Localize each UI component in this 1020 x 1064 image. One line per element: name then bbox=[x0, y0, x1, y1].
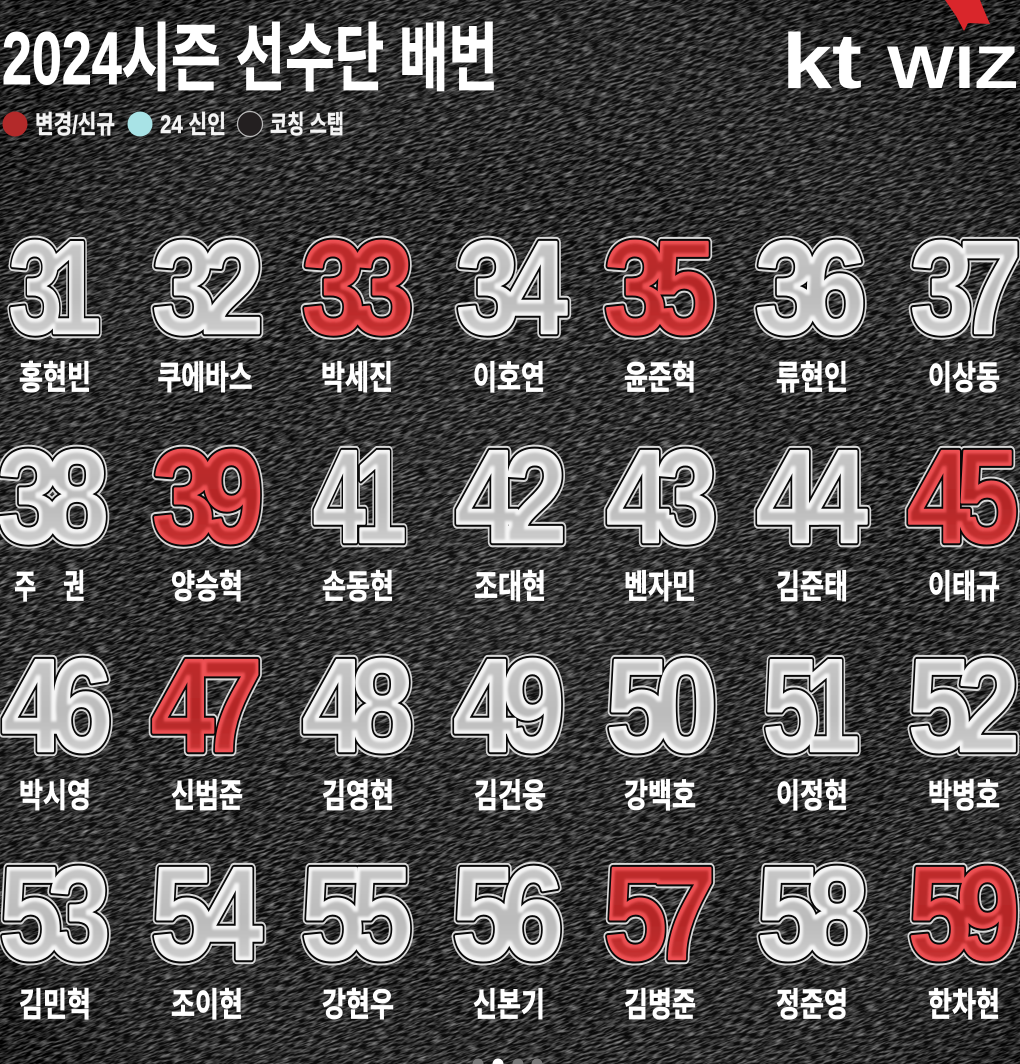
number 54: 54 bbox=[151, 839, 262, 987]
number 35: 35 bbox=[604, 213, 715, 361]
name 39: 양승혁 bbox=[171, 568, 243, 605]
number 38: 38 bbox=[0, 422, 108, 570]
number 47: 47 bbox=[151, 631, 262, 779]
number 59: 59 bbox=[908, 839, 1019, 987]
number 32: 32 bbox=[152, 213, 263, 361]
name 41: 손동현 bbox=[322, 568, 394, 605]
number 37: 37 bbox=[910, 213, 1020, 361]
legend: changed or new bbox=[2, 111, 115, 139]
number 37: 37 bbox=[910, 213, 1020, 361]
legend: 2024 rookie bbox=[128, 111, 226, 139]
number 46: 46 bbox=[1, 631, 112, 779]
number 36: 36 bbox=[755, 213, 866, 361]
number 35: 35 bbox=[604, 213, 715, 361]
number 35: 35 bbox=[604, 213, 715, 361]
number 51: 51 bbox=[763, 631, 860, 779]
number 44: 44 bbox=[756, 422, 867, 570]
number 38: 38 bbox=[0, 422, 108, 570]
number 51: 51 bbox=[763, 631, 860, 779]
name 32: 쿠에바스 bbox=[158, 359, 252, 396]
number 57: 57 bbox=[604, 839, 715, 987]
name 38: 주권 bbox=[14, 569, 85, 606]
number 55: 55 bbox=[301, 839, 412, 987]
number 47: 47 bbox=[151, 631, 262, 779]
name 57: 김병준 bbox=[624, 986, 696, 1023]
number 59: 59 bbox=[908, 839, 1019, 987]
name 33: 박세진 bbox=[321, 359, 393, 396]
number 41: 41 bbox=[313, 423, 406, 571]
carousel dots bbox=[472, 1058, 542, 1064]
number 53: 53 bbox=[0, 839, 110, 987]
number 44: 44 bbox=[756, 422, 867, 570]
number 52: 52 bbox=[908, 631, 1019, 779]
number 33: 33 bbox=[302, 213, 413, 361]
number 57: 57 bbox=[604, 839, 715, 987]
number 59: 59 bbox=[908, 839, 1019, 987]
title: 2024시즌 선수단 배번 bbox=[2, 17, 498, 100]
number 36: 36 bbox=[755, 213, 866, 361]
name 44: 김준태 bbox=[776, 568, 848, 605]
logo: kt wiz bbox=[782, 0, 1018, 105]
name 49: 김건웅 bbox=[474, 777, 546, 814]
name 48: 김영현 bbox=[322, 777, 394, 814]
number 45: 45 bbox=[907, 422, 1018, 570]
number 31: 31 bbox=[9, 215, 101, 362]
number 56: 56 bbox=[452, 839, 563, 987]
number 50: 50 bbox=[606, 631, 717, 779]
number 42: 42 bbox=[455, 422, 566, 570]
number 42: 42 bbox=[455, 422, 566, 570]
logo: kt wiz: WIZ bbox=[887, 34, 1018, 101]
number 55: 55 bbox=[301, 839, 412, 987]
number 52: 52 bbox=[908, 631, 1019, 779]
name 52: 박병호 bbox=[928, 777, 1000, 814]
number 33: 33 bbox=[302, 213, 413, 361]
number 57: 57 bbox=[604, 839, 715, 987]
number 59: 59 bbox=[908, 839, 1019, 987]
name 51: 이정현 bbox=[776, 777, 848, 814]
name 56: 신본기 bbox=[473, 986, 545, 1023]
number 34: 34 bbox=[456, 213, 567, 361]
number 51: 51 bbox=[763, 631, 860, 779]
number 47: 47 bbox=[151, 631, 262, 779]
number 55: 55 bbox=[301, 839, 412, 987]
name 42: 조대현 bbox=[474, 568, 546, 605]
number 50: 50 bbox=[606, 631, 717, 779]
number 58: 58 bbox=[757, 839, 868, 987]
name 58: 정준영 bbox=[776, 986, 848, 1023]
number 48: 48 bbox=[302, 631, 413, 779]
number 36: 36 bbox=[755, 213, 866, 361]
number 53: 53 bbox=[0, 839, 110, 987]
number 52: 52 bbox=[908, 631, 1019, 779]
number 58: 58 bbox=[757, 839, 868, 987]
number 45: 45 bbox=[907, 422, 1018, 570]
number 51: 51 bbox=[763, 631, 860, 779]
number 49: 49 bbox=[453, 631, 564, 779]
number 34: 34 bbox=[456, 213, 567, 361]
number 54: 54 bbox=[151, 839, 262, 987]
number 33: 33 bbox=[302, 213, 413, 361]
name 54: 조이현 bbox=[171, 986, 243, 1023]
name 43: 벤자민 bbox=[624, 568, 696, 605]
number 39: 39 bbox=[152, 422, 263, 570]
name 46: 박시영 bbox=[19, 777, 91, 814]
number 58: 58 bbox=[757, 839, 868, 987]
legend: changed or new: 변경/신규 bbox=[35, 111, 115, 139]
number 39: 39 bbox=[152, 422, 263, 570]
legend: coaching staff: 코칭 스탭 bbox=[270, 111, 344, 139]
name 37: 이상동 bbox=[928, 359, 1000, 396]
number 48: 48 bbox=[302, 631, 413, 779]
number 48: 48 bbox=[302, 631, 413, 779]
name 34: 이호연 bbox=[473, 359, 545, 396]
number 55: 55 bbox=[301, 839, 412, 987]
number 44: 44 bbox=[756, 422, 867, 570]
number 46: 46 bbox=[1, 631, 112, 779]
name 31: 홍현빈 bbox=[19, 359, 91, 396]
number 48: 48 bbox=[302, 631, 413, 779]
name 55: 강현우 bbox=[322, 986, 394, 1023]
number 38: 38 bbox=[0, 422, 108, 570]
name 59: 한차현 bbox=[928, 986, 1000, 1023]
number 49: 49 bbox=[453, 631, 564, 779]
number 37: 37 bbox=[910, 213, 1020, 361]
number 53: 53 bbox=[0, 839, 110, 987]
number 56: 56 bbox=[452, 839, 563, 987]
number 46: 46 bbox=[1, 631, 112, 779]
name 35: 윤준혁 bbox=[624, 359, 696, 396]
number 41: 41 bbox=[313, 423, 406, 571]
legend bbox=[2, 111, 344, 139]
number 49: 49 bbox=[453, 631, 564, 779]
number 54: 54 bbox=[151, 839, 262, 987]
number 52: 52 bbox=[908, 631, 1019, 779]
number 56: 56 bbox=[452, 839, 563, 987]
number 31: 31 bbox=[9, 215, 101, 362]
legend: coaching staff bbox=[238, 111, 344, 139]
number 49: 49 bbox=[453, 631, 564, 779]
number 39: 39 bbox=[152, 422, 263, 570]
number 32: 32 bbox=[152, 213, 263, 361]
number 50: 50 bbox=[606, 631, 717, 779]
number 45: 45 bbox=[907, 422, 1018, 570]
logo: kt wiz: kt bbox=[782, 17, 862, 105]
name 36: 류현인 bbox=[776, 359, 848, 396]
number 34: 34 bbox=[456, 213, 567, 361]
number 38: 38 bbox=[0, 422, 108, 570]
number 35: 35 bbox=[604, 213, 715, 361]
number 41: 41 bbox=[313, 423, 406, 571]
number 54: 54 bbox=[151, 839, 262, 987]
number 37: 37 bbox=[910, 213, 1020, 361]
legend: 2024 rookie: 24 신인 bbox=[160, 111, 226, 139]
name 45: 이태규 bbox=[928, 568, 1000, 605]
number 45: 45 bbox=[907, 422, 1018, 570]
number 41: 41 bbox=[313, 423, 406, 571]
number 44: 44 bbox=[756, 422, 867, 570]
name 47: 신범준 bbox=[171, 777, 243, 814]
name 50: 강백호 bbox=[624, 777, 696, 814]
number 47: 47 bbox=[151, 631, 262, 779]
number 56: 56 bbox=[452, 839, 563, 987]
number 36: 36 bbox=[755, 213, 866, 361]
number 43: 43 bbox=[606, 422, 717, 570]
number 33: 33 bbox=[302, 213, 413, 361]
number 53: 53 bbox=[0, 839, 110, 987]
number 42: 42 bbox=[455, 422, 566, 570]
number 58: 58 bbox=[757, 839, 868, 987]
number 46: 46 bbox=[1, 631, 112, 779]
number 32: 32 bbox=[152, 213, 263, 361]
number 50: 50 bbox=[606, 631, 717, 779]
number 31: 31 bbox=[9, 215, 101, 362]
number 34: 34 bbox=[456, 213, 567, 361]
number 32: 32 bbox=[152, 213, 263, 361]
number 43: 43 bbox=[606, 422, 717, 570]
number 31: 31 bbox=[9, 215, 101, 362]
number 43: 43 bbox=[606, 422, 717, 570]
name 53: 김민혁 bbox=[19, 986, 91, 1023]
number 43: 43 bbox=[606, 422, 717, 570]
number 57: 57 bbox=[604, 839, 715, 987]
number 42: 42 bbox=[455, 422, 566, 570]
number 39: 39 bbox=[152, 422, 263, 570]
